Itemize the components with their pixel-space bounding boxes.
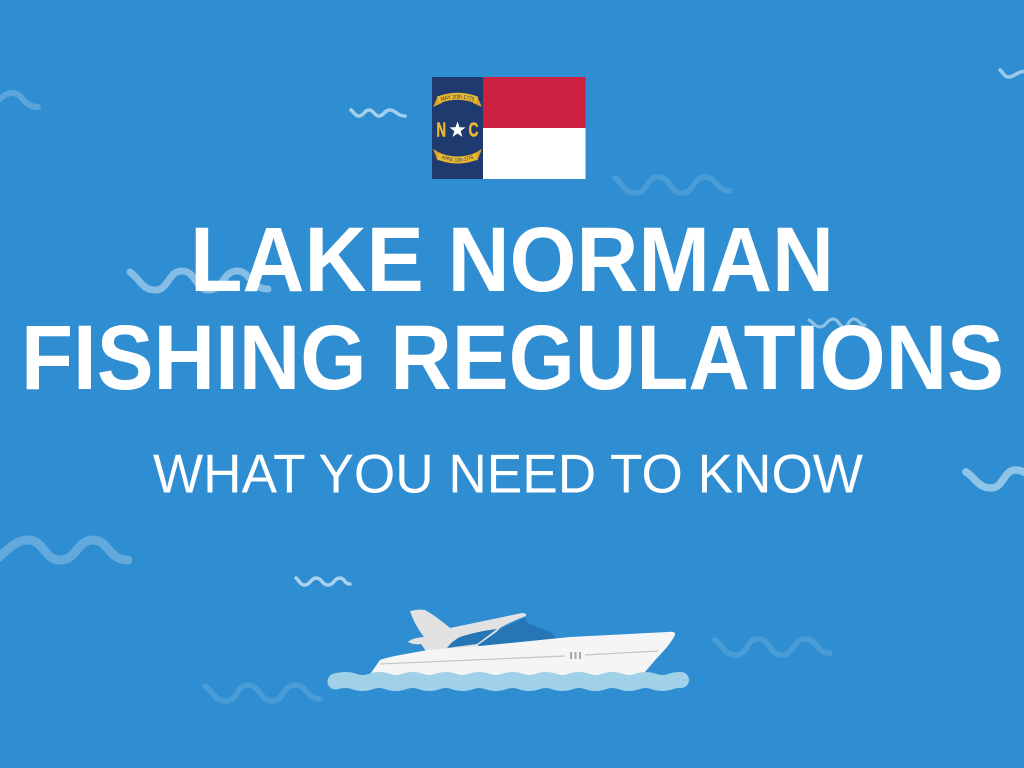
yacht grey superstructure — [408, 610, 526, 654]
wave: faint bottom left of boat — [205, 685, 320, 701]
wave: behind LAKE — [130, 271, 268, 290]
wave: right edge — [966, 470, 1024, 488]
yacht dark windows — [447, 618, 557, 648]
yacht vents — [571, 652, 580, 659]
wave: small top centre-left — [351, 110, 405, 116]
wave: faint upper right of flag — [615, 177, 730, 193]
title — [21, 209, 1004, 409]
flag letters and star: C — [468, 120, 478, 142]
wave: small behind REGULATIONS — [809, 319, 865, 327]
icon: motor yacht on water — [336, 610, 681, 683]
yacht hull line — [380, 651, 658, 664]
title line 1: LAKE NORMAN — [190, 209, 834, 311]
wave: small lower centre-left — [296, 578, 350, 585]
flag lower banner — [433, 149, 482, 164]
wave: large lower left — [0, 540, 128, 563]
water band — [336, 680, 681, 683]
yacht hull — [366, 632, 675, 680]
wave: faint bottom right of boat — [715, 639, 830, 655]
flag letters and star — [436, 120, 478, 142]
flag lower banner: APRIL 12th 1776 — [442, 156, 474, 162]
flag upper banner: MAY 20th 1775 — [440, 94, 474, 101]
flag letters and star: N — [436, 120, 446, 142]
icon: North Carolina flag — [432, 77, 586, 179]
subtitle: WHAT YOU NEED TO KNOW — [153, 442, 863, 504]
flag upper banner — [433, 92, 482, 107]
wave: top right corner — [1000, 70, 1024, 77]
wave: top left edge — [0, 93, 38, 107]
